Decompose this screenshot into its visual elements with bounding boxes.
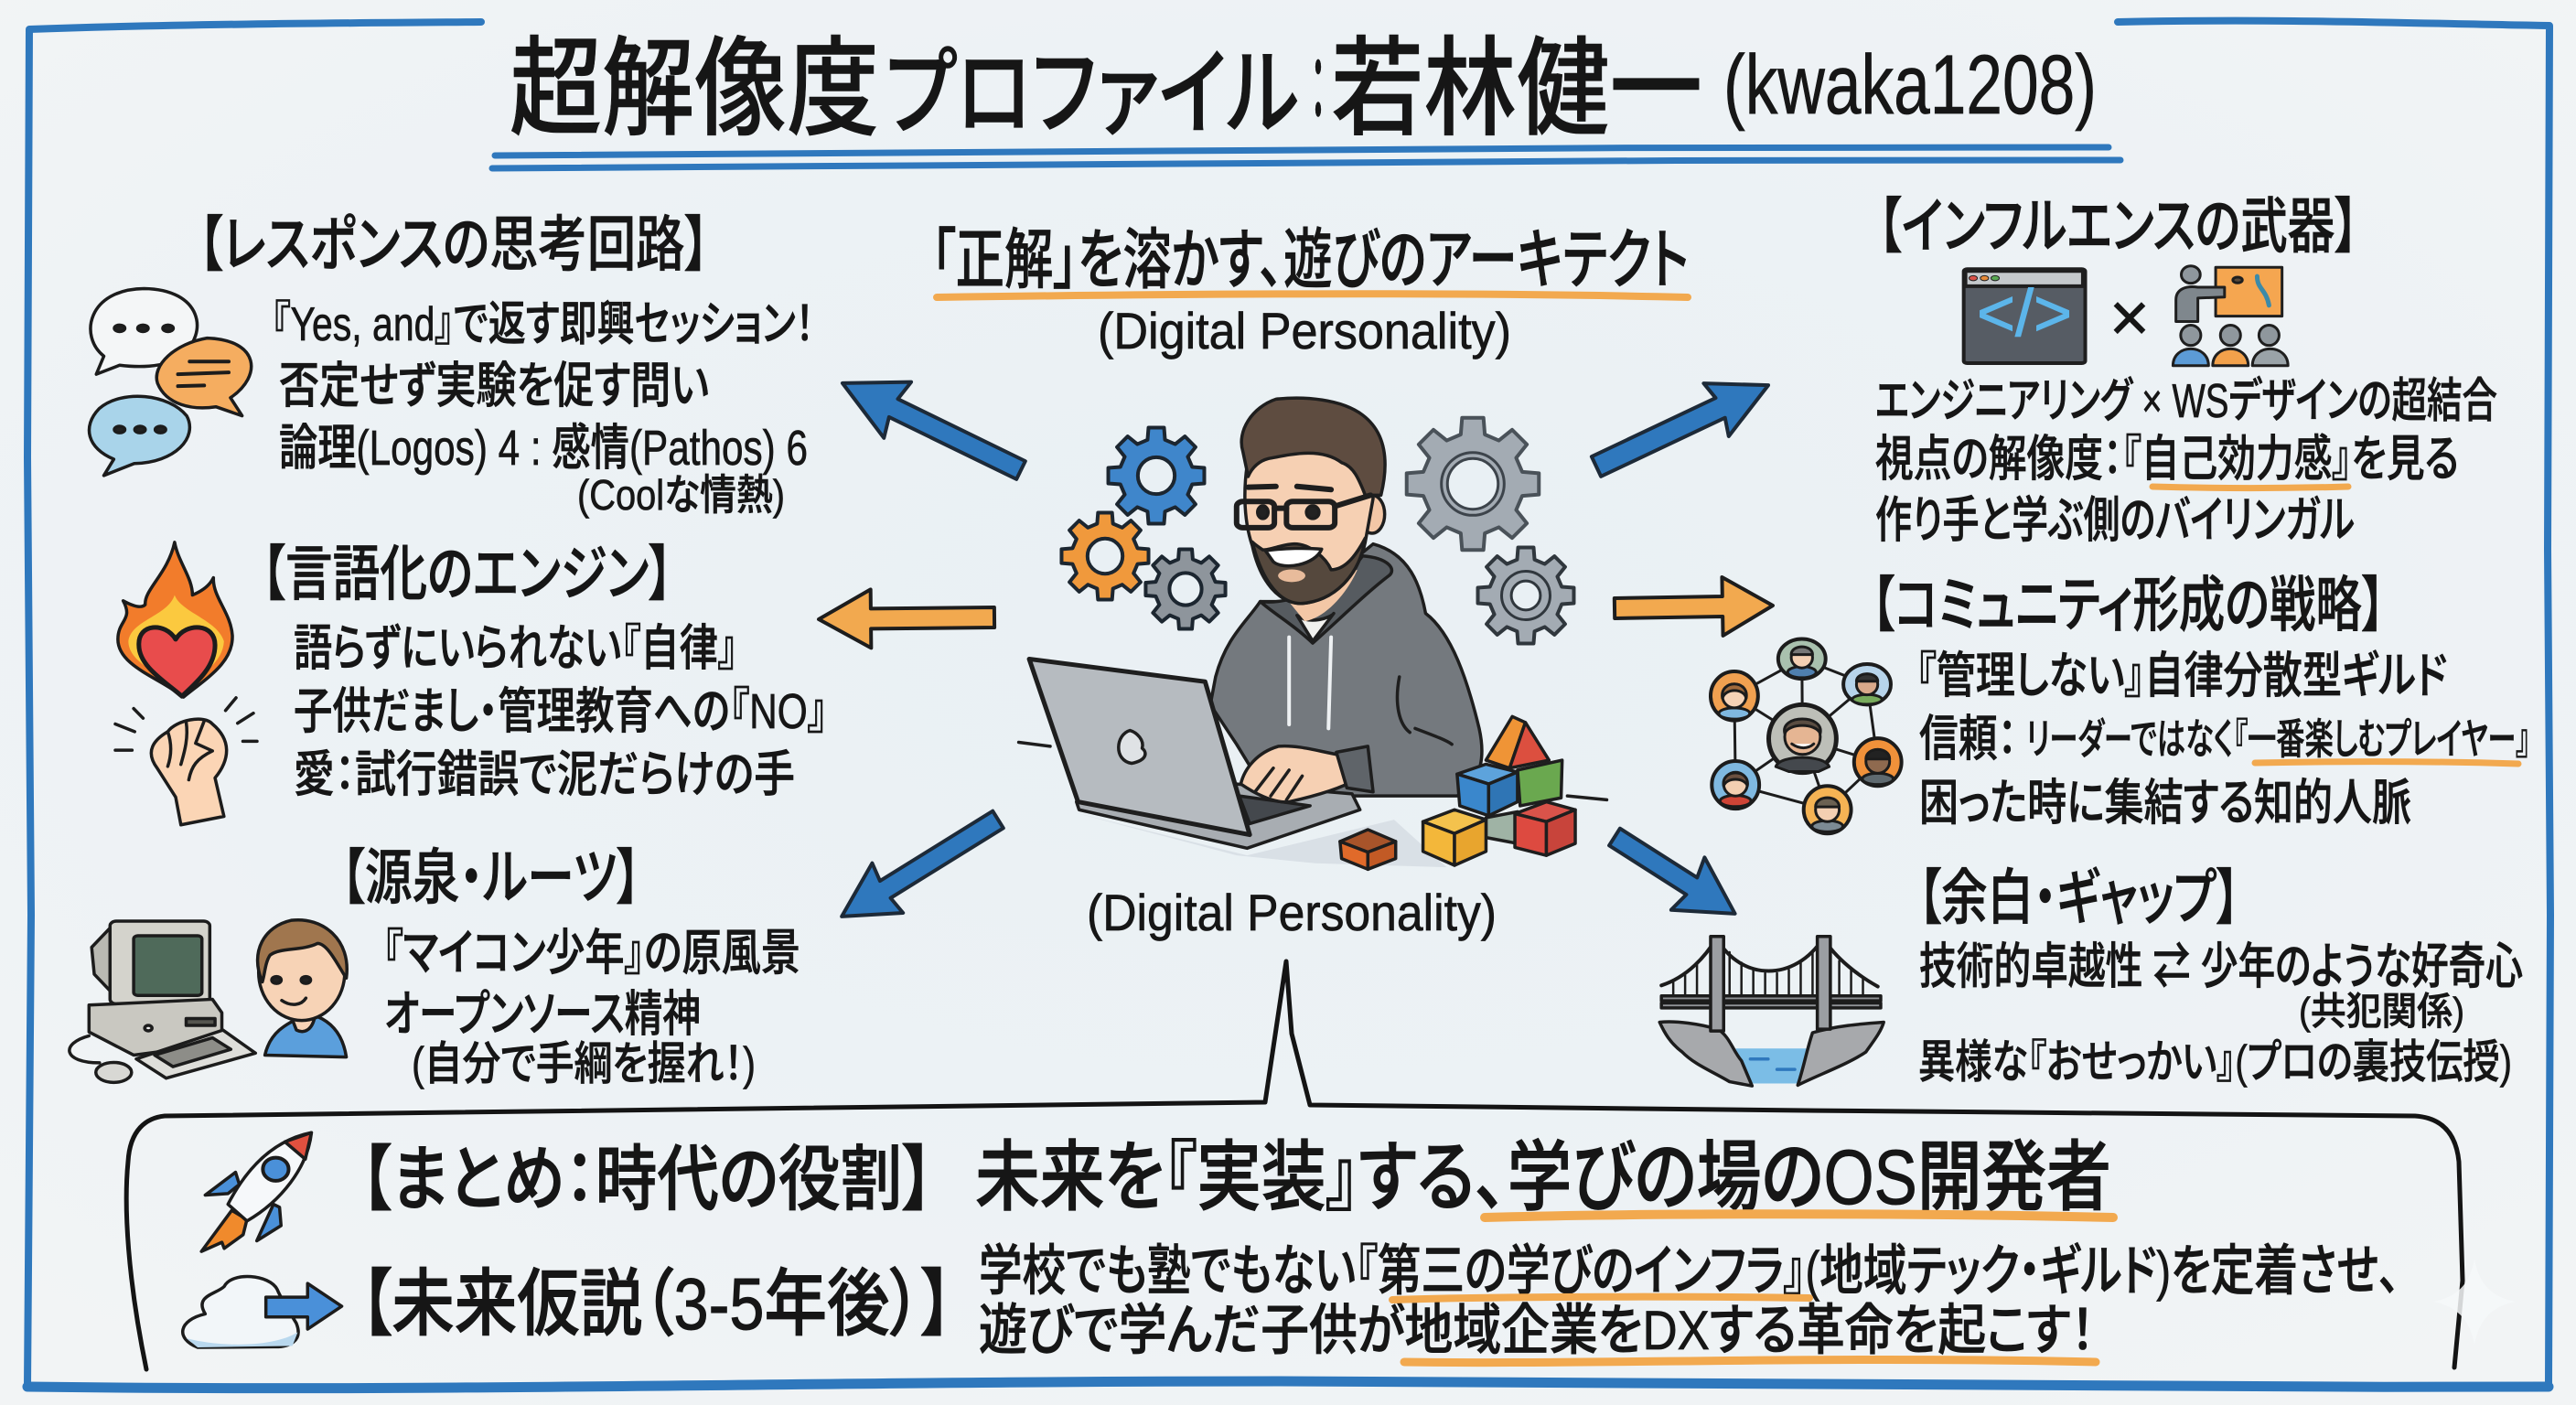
hood opening (1261, 556, 1391, 643)
arrow: left orange (819, 588, 994, 649)
icon: large grey gear (1407, 418, 1539, 550)
keyboard (1240, 796, 1310, 823)
title (510, 29, 2097, 150)
text block: 愛：試行錯誤で泥だらけの手 (294, 747, 795, 802)
text block: 困った時に集結する知的人脈 (1919, 776, 2411, 831)
text block (272, 298, 814, 519)
callout outline with spike (126, 961, 2463, 1369)
panel: verbalization engine (115, 540, 827, 825)
panel: influence weapons (1875, 192, 2497, 548)
beard (1252, 538, 1365, 604)
cuff (1336, 746, 1373, 792)
face (1245, 439, 1373, 604)
title: ： (1310, 42, 1326, 140)
text block: 作り手と学ぶ側のバイリンガル (1875, 493, 2355, 548)
desk shadow (1071, 811, 1446, 867)
hoodie strings (1289, 638, 1331, 728)
title double underline (492, 147, 2120, 168)
future text block (979, 1240, 2400, 1361)
role statement: 未来を『実装』する、学びの場のOS開発者 (975, 1134, 2111, 1220)
title: 若林健一 (1331, 29, 1702, 150)
icon: rocket (201, 1132, 311, 1251)
title: プロファイル (886, 41, 1299, 147)
central tagline: 「正解」を溶かす、遊びのアーキテクト (931, 224, 1689, 297)
highlight underline (2152, 487, 2348, 488)
smile (1265, 548, 1322, 566)
callout box: summary (126, 961, 2463, 1369)
future text block: 遊びで学んだ子供が地域企業をDXする革命を起こす！ (979, 1300, 2095, 1361)
text block: 信頼： (1919, 712, 2017, 767)
gears cluster (1061, 418, 1573, 643)
icon: orange gear (1061, 512, 1149, 600)
heading: 【レスポンスの思考回路】 (199, 210, 709, 278)
text block: 『管理しない』自律分散型ギルド (1916, 649, 2447, 703)
icon: heart flame and fist (115, 542, 257, 825)
block: green (1518, 760, 1562, 806)
text block (294, 621, 827, 802)
heading: 【コミュニティ形成の戦略】 (1872, 571, 2385, 638)
heading: 【源泉・ルーツ】 (341, 843, 640, 911)
arrow: right orange (1614, 576, 1774, 638)
arrow: upper left (829, 355, 1035, 499)
heading: 【余白・ギャップ】 (1918, 863, 2239, 931)
highlight underline (1485, 1214, 2113, 1217)
icon: code window (1964, 269, 2086, 363)
icon: suspension bridge (1659, 937, 1884, 1086)
sleeve crease (1397, 677, 1452, 745)
block: blue (1457, 764, 1518, 784)
hand (1240, 746, 1355, 802)
text block: (Coolな情熱) (577, 471, 785, 519)
arrow: lower left (826, 795, 1014, 941)
text block: オープンソース精神 (384, 987, 701, 1042)
text block (1875, 375, 2497, 548)
title: (kwaka1208) (1723, 38, 2097, 132)
text block: 否定せず実験を促す問い (279, 359, 709, 413)
icon: small grey gear (1145, 549, 1226, 629)
t-shirt and neck (1297, 614, 1334, 641)
icon: code window: </> (1977, 277, 2072, 350)
text block: (共犯関係) (2299, 990, 2464, 1033)
heading: 【インフルエンスの武器】 (1878, 192, 2358, 260)
text block: 『マイコン少年』の原風景 (383, 926, 800, 981)
panel: response thought circuit (89, 210, 814, 519)
block: triangle (1486, 716, 1526, 768)
text block (1916, 649, 2530, 831)
text block: 論理(Logos) 4 : 感情(Pathos) 6 (279, 421, 808, 476)
eyes (1258, 506, 1268, 519)
icon: workshop teacher (2173, 266, 2288, 366)
block: pale back (1486, 811, 1518, 843)
glasses (1237, 501, 1274, 528)
highlight underlines (1392, 1297, 2096, 1363)
laptop base (1077, 784, 1360, 848)
highlight underline (2255, 762, 2518, 764)
icon: speech bubbles (89, 288, 252, 476)
caption: Digital Personality under the character: (Digital Personality) (1087, 884, 1497, 941)
multiply sign: × (2109, 279, 2150, 357)
ear (1359, 495, 1385, 533)
text block: 語らずにいられない『自律』 (294, 621, 737, 676)
hair (1241, 398, 1385, 495)
block: small orange (1340, 830, 1396, 853)
text block: (自分で手綱を握れ！) (412, 1038, 756, 1089)
icon: retro computer and boy (70, 920, 347, 1082)
heading: 【言語化のエンジン】 (262, 540, 672, 607)
sparkle watermark (2433, 1259, 2516, 1345)
hoodie (1210, 544, 1482, 796)
central character with laptop and blocks (1019, 398, 1606, 869)
eyebrows (1248, 487, 1331, 489)
text block (383, 926, 800, 1089)
panel: margin and gap (1659, 863, 2523, 1088)
text block: 『Yes, and』で返す即興セッション！ (272, 298, 814, 351)
subtitle: Digital Personality top: (Digital Personality) (1098, 302, 1511, 359)
block: yellow (1423, 810, 1486, 833)
arrow: upper right (1583, 359, 1781, 493)
panel: community strategy (1711, 571, 2530, 833)
block: red (1515, 802, 1575, 821)
arrow: lower right (1598, 810, 1752, 939)
laptop screen (1029, 659, 1250, 835)
chin skin (1278, 569, 1305, 582)
text block: 子供だまし・管理教育への『NO』 (294, 684, 827, 739)
heading: summary: 【まとめ：時代の役割】 (360, 1139, 933, 1219)
icon: blue gear (1109, 428, 1204, 523)
icon: people network (1711, 638, 1902, 833)
title: 超解像度 (510, 29, 879, 150)
icon: right grey gear (1478, 548, 1573, 643)
icon: cloud with arrow (183, 1276, 342, 1347)
text block (1918, 939, 2523, 1088)
panel: origin roots (70, 843, 800, 1089)
apple logo (1119, 731, 1145, 764)
heading: future hypothesis: 【未来仮説（3-5年後）】 (360, 1263, 952, 1345)
desk lines (1019, 743, 1606, 799)
